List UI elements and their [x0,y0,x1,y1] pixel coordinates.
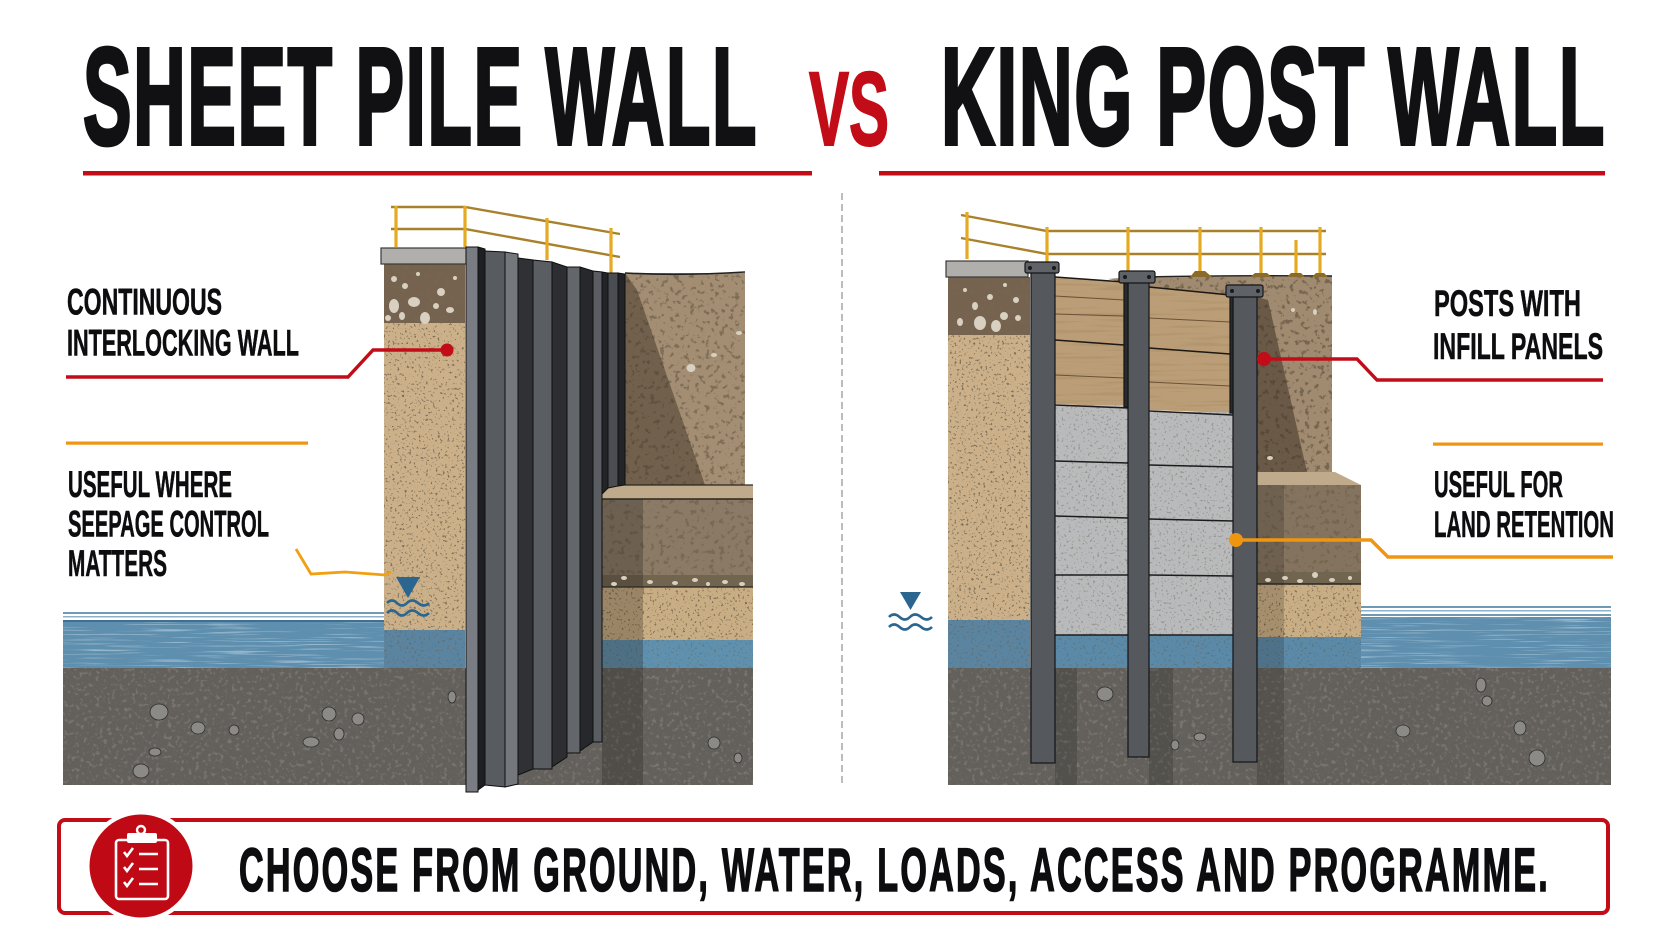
label: continuous interlocking wall: INTERLOCKING WALL [67,322,299,364]
icon: clipboard checklist [85,810,197,922]
callout: orange leader [296,549,391,575]
concrete capping beam [381,248,480,264]
label: continuous interlocking wall [67,282,299,364]
takeaway border [59,820,1608,913]
label: useful where seepage control matters: USEFUL WHERE [68,464,232,505]
concrete infill panels [1055,405,1233,635]
panel: king post wall diagram [889,212,1611,785]
label: useful where seepage control matters: MATTERS [68,543,167,584]
title: vs: VS [809,51,889,168]
sheet pile wall [466,247,625,792]
guard railing [961,212,1328,277]
panel: sheet pile wall diagram [63,206,753,792]
icon: water table [889,592,932,630]
label: continuous interlocking wall: CONTINUOUS [67,282,222,322]
icon: water table [387,577,429,616]
ground layers [948,276,1611,785]
label: useful for land retention [1434,464,1614,545]
underline: left heading [83,171,812,176]
steel king posts [1025,262,1263,763]
label: useful where seepage control matters: SEEPAGE CONTROL [68,504,269,544]
label: posts with infill panels: POSTS WITH [1434,283,1581,324]
callout: orange leader [1229,533,1613,557]
label: posts with infill panels [1433,283,1603,367]
underline: right heading [879,171,1605,176]
callout: red leader [66,344,454,377]
panel: bottom takeaway [59,810,1608,922]
divider: orange rule [1433,442,1603,446]
timber infill panels [1055,277,1230,413]
ground layers [63,264,753,785]
divider: orange rule [66,442,308,445]
concrete capping beam [946,261,1028,277]
title: sheet pile wall: SHEET PILE WALL [83,20,758,174]
callout: red leader [1257,352,1603,380]
label: useful for land retention: USEFUL FOR [1434,464,1563,505]
guard railing [391,206,620,273]
label: useful where seepage control matters [68,464,269,584]
